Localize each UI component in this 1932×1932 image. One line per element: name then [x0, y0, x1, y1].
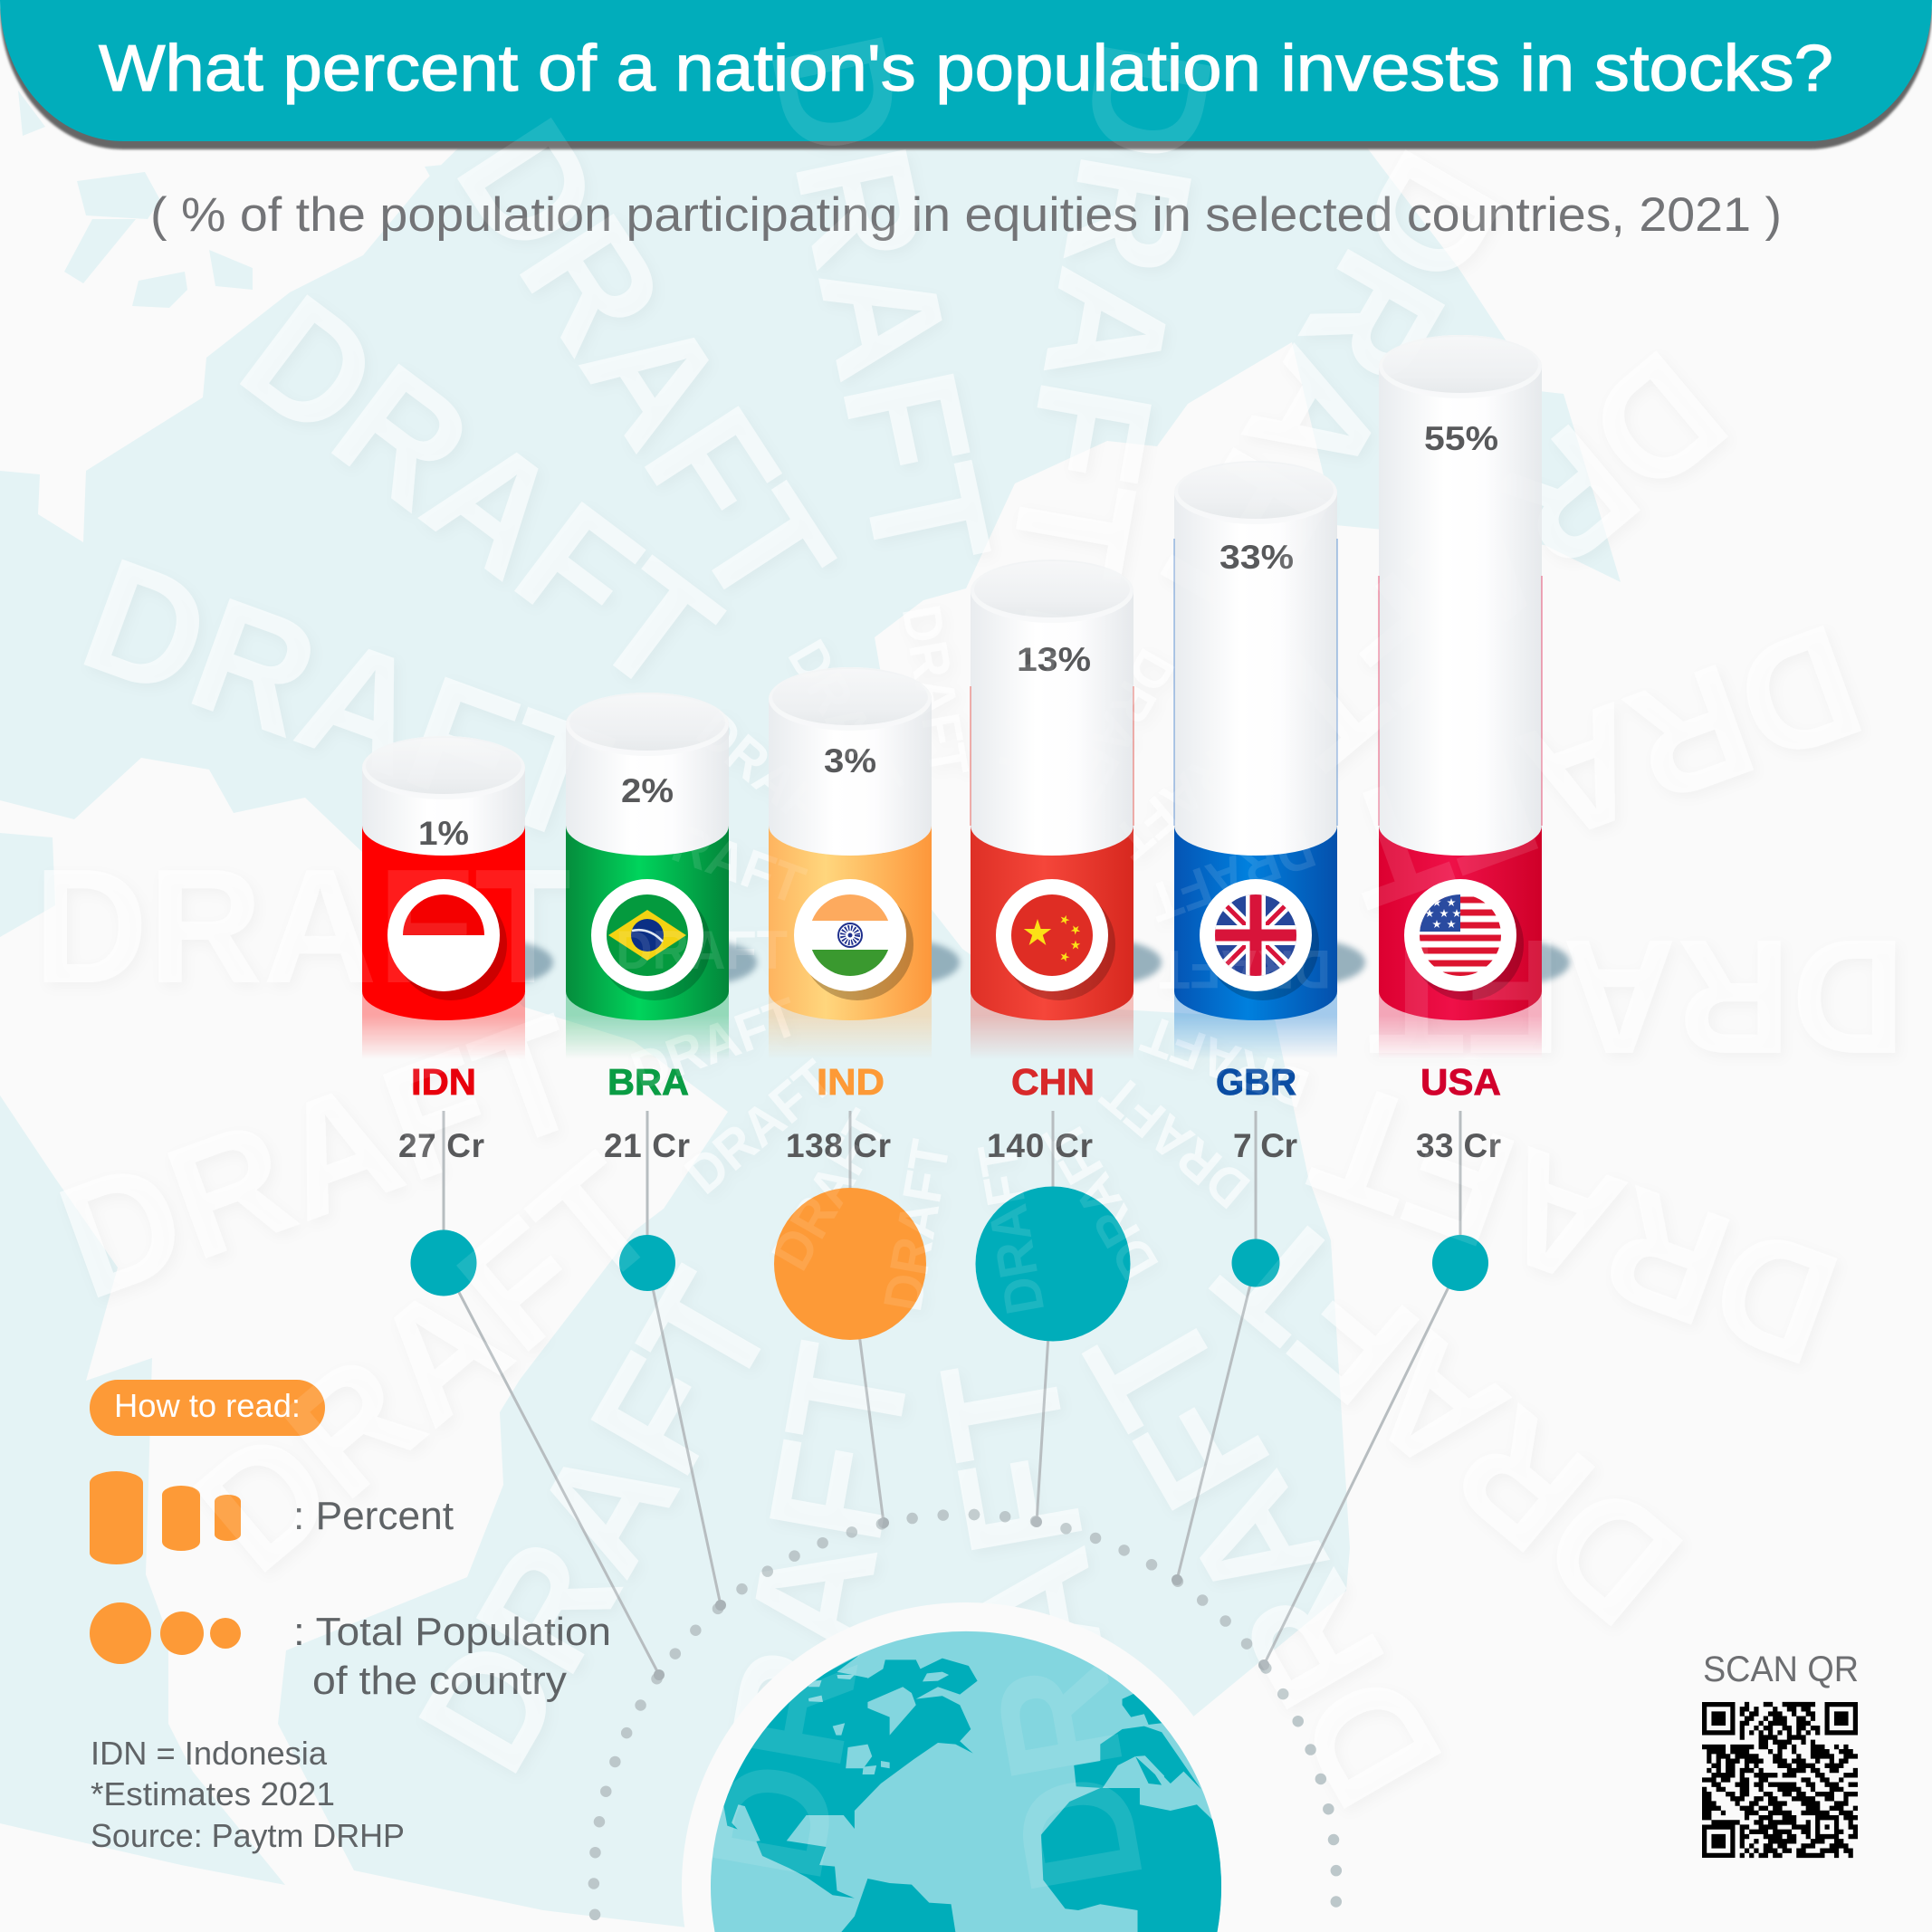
watermark: DRAFT rings, overlay layer: DRAFT	[33, 836, 571, 1018]
watermark: DRAFT rings, overlay layer: DRAFT	[1315, 588, 1883, 943]
watermark: DRAFT rings, under layer: DRAFT	[872, 1135, 961, 1315]
watermark: DRAFT rings, overlay layer: DRAFT	[1229, 317, 1758, 802]
watermark: DRAFT rings, under layer: DRAFT	[1102, 713, 1273, 871]
flag: India	[809, 894, 891, 976]
watermark: DRAFT rings, under layer: DRAFT	[735, 20, 1025, 584]
watermark: DRAFT rings, under layer: DRAFT	[1368, 905, 1906, 1087]
header band	[0, 0, 1932, 149]
watermark: DRAFT rings, under layer: DRAFT	[62, 523, 629, 878]
watermark: DRAFT rings, overlay layer: DRAFT	[1368, 905, 1906, 1087]
population labels: 33 Cr	[1416, 1127, 1501, 1164]
watermark: DRAFT rings, under layer: DRAFT	[891, 600, 980, 780]
watermark: DRAFT rings, overlay layer: DRAFT	[1292, 1045, 1860, 1400]
leader lines from cylinders through circles to the arc	[444, 1111, 1460, 1680]
watermark: DRAFT rings, under layer: DRAFT	[1159, 939, 1331, 999]
legend: population text: : Total Population	[293, 1610, 611, 1654]
watermark: DRAFT rings, overlay layer: DRAFT	[384, 1244, 810, 1800]
watermark: DRAFT rings, overlay layer: DRAFT	[1102, 713, 1273, 871]
watermark: DRAFT rings, under layer: DRAFT	[1031, 1110, 1170, 1289]
watermark: DRAFT rings, overlay layer: DRAFT	[1090, 1063, 1260, 1220]
watermark: DRAFT rings, under layer: DRAFT	[38, 980, 606, 1334]
percent labels: 3%	[824, 742, 876, 779]
watermark: DRAFT rings, overlay layer: DRAFT	[686, 699, 856, 856]
footnotes and source: Source: Paytm DRHP	[91, 1817, 405, 1854]
country codes: IND	[817, 1061, 885, 1103]
watermark: DRAFT rings, under layer: DRAFT	[210, 261, 749, 730]
cylinder: Indonesia	[362, 736, 553, 1059]
population labels: 21 Cr	[604, 1127, 690, 1164]
percent labels: 55%	[1424, 420, 1498, 457]
watermark: DRAFT rings, under layer: DRAFT	[1111, 123, 1537, 679]
population labels: 140 Cr	[987, 1127, 1093, 1164]
legend: population text	[293, 1610, 611, 1703]
watermark: DRAFT rings, under layer: DRAFT	[906, 1344, 1179, 1905]
watermark: DRAFT rings, overlay layer: DRAFT	[872, 1135, 961, 1315]
population circles	[411, 1186, 1488, 1342]
cylinder: Brazil	[566, 693, 757, 1059]
country codes: CHN	[1011, 1061, 1095, 1103]
flag: United Kingdom	[1215, 894, 1296, 976]
flag: United States	[1420, 894, 1501, 976]
footnotes and source: IDN = Indonesia	[91, 1735, 328, 1772]
globe with white halo	[682, 1602, 1250, 1932]
watermark: DRAFT rings, under layer: DRAFT	[985, 604, 1075, 784]
watermark: DRAFT rings, under layer: DRAFT	[1315, 588, 1883, 943]
subtitle: ( % of the population participating in equities in selected countries, 2021 )	[150, 188, 1782, 242]
watermark: DRAFT rings, overlay layer: DRAFT	[38, 980, 606, 1334]
legend pill: How to read:	[114, 1387, 301, 1424]
watermark: DRAFT rings, overlay layer: DRAFT	[62, 523, 629, 878]
watermark: DRAFT rings, under layer: DRAFT	[1185, 1174, 1714, 1659]
watermark: DRAFT rings, overlay layer: DRAFT	[210, 261, 749, 730]
population labels: 7 Cr	[1233, 1127, 1297, 1164]
dotted arc above the globe	[594, 1515, 1336, 1924]
watermark: DRAFT rings, overlay layer: DRAFT	[891, 600, 980, 780]
cylinder: China	[971, 560, 1162, 1059]
watermark: DRAFT rings, overlay layer: DRAFT	[1141, 818, 1323, 933]
population labels: 27 Cr	[398, 1127, 484, 1164]
cylinder: India	[769, 667, 960, 1059]
watermark: DRAFT rings, under layer: DRAFT	[1090, 1063, 1260, 1220]
watermark: DRAFT rings, under layer: DRAFT	[384, 1244, 810, 1800]
background world map	[0, 91, 1621, 1932]
watermark: DRAFT rings, overlay layer: DRAFT	[777, 630, 915, 809]
country codes: IDN	[411, 1061, 476, 1103]
watermark: DRAFT rings, overlay layer: DRAFT	[163, 1121, 692, 1606]
watermark: DRAFT rings, under layer: DRAFT	[674, 1332, 947, 1893]
cylinder: United Kingdom	[1174, 461, 1365, 1059]
legend: population circles	[90, 1602, 241, 1664]
QR code	[1702, 1702, 1858, 1858]
watermark: DRAFT rings, under layer: DRAFT	[163, 1121, 692, 1606]
watermark: DRAFT rings, under layer: DRAFT	[1048, 639, 1187, 818]
watermark: DRAFT rings, overlay layer: DRAFT	[674, 1048, 845, 1206]
population labels	[398, 1127, 1501, 1164]
watermark: DRAFT rings, under layer: DRAFT	[630, 800, 812, 915]
percent labels: 33%	[1219, 539, 1294, 576]
watermark: DRAFT rings, overlay layer: DRAFT	[1051, 1278, 1478, 1835]
watermark: DRAFT rings, under layer: DRAFT	[974, 30, 1247, 591]
cylinder: United States	[1379, 335, 1570, 1059]
watermark: DRAFT rings, overlay layer: DRAFT	[1031, 1110, 1170, 1289]
watermark: DRAFT rings, overlay layer: DRAFT	[624, 986, 806, 1102]
flag: Indonesia	[403, 894, 484, 935]
watermark: DRAFT rings, overlay layer: DRAFT	[1185, 1174, 1714, 1659]
watermark: DRAFT rings, overlay layer: DRAFT	[630, 800, 812, 915]
watermark: DRAFT rings, under layer: DRAFT	[760, 1101, 898, 1280]
watermark: DRAFT rings, overlay layer: DRAFT	[1048, 639, 1187, 818]
percent labels: 2%	[621, 772, 674, 809]
country codes	[411, 1061, 1501, 1103]
watermark: DRAFT rings, overlay layer: DRAFT	[1134, 1004, 1316, 1119]
country codes: USA	[1420, 1061, 1501, 1103]
flag: Brazil	[607, 894, 688, 976]
watermark: DRAFT rings, under layer: DRAFT	[1141, 818, 1323, 933]
watermark: DRAFT rings, under layer: DRAFT	[686, 699, 856, 856]
watermark: DRAFT rings, under layer: DRAFT	[1134, 1004, 1316, 1119]
watermark: DRAFT rings, overlay layer: DRAFT	[674, 1332, 947, 1893]
watermark: DRAFT rings, under layer: DRAFT	[422, 90, 867, 640]
flag: China	[1011, 894, 1093, 976]
title: What percent of a nation's population invests in stocks?	[99, 33, 1833, 105]
watermark: DRAFT rings, overlay layer: DRAFT	[760, 1101, 898, 1280]
watermark: DRAFT rings, overlay layer: DRAFT	[906, 1344, 1179, 1905]
watermark: DRAFT rings, overlay layer: DRAFT	[616, 920, 788, 980]
percent labels	[418, 420, 1498, 852]
watermark: DRAFT rings, overlay layer: DRAFT	[422, 90, 867, 640]
legend pill	[90, 1380, 325, 1436]
watermark: DRAFT rings, overlay layer: DRAFT	[1111, 123, 1537, 679]
legend: percent text: : Percent	[293, 1494, 454, 1538]
watermark: DRAFT rings, under layer: DRAFT	[624, 986, 806, 1102]
population labels: 138 Cr	[786, 1127, 891, 1164]
watermark: DRAFT rings, under layer: DRAFT	[1229, 317, 1758, 802]
watermark: DRAFT rings, overlay layer: DRAFT	[966, 1139, 1056, 1319]
watermark: DRAFT rings, under layer: DRAFT	[1051, 1278, 1478, 1835]
footnotes and source	[91, 1735, 405, 1854]
footnotes and source: *Estimates 2021	[91, 1775, 335, 1812]
watermark: DRAFT rings, under layer: DRAFT	[1292, 1045, 1860, 1400]
watermark: DRAFT rings, under layer: DRAFT	[966, 1139, 1056, 1319]
watermark: DRAFT rings, under layer: DRAFT	[616, 920, 788, 980]
watermark: DRAFT rings, under layer: DRAFT	[33, 836, 571, 1018]
percent labels: 1%	[418, 815, 469, 852]
watermark: DRAFT rings, overlay layer: DRAFT	[985, 604, 1075, 784]
percent labels: 13%	[1017, 641, 1091, 678]
legend: percent cylinders	[90, 1471, 241, 1564]
country codes: BRA	[607, 1061, 689, 1103]
watermark: DRAFT rings, overlay layer: DRAFT	[1159, 939, 1331, 999]
legend: population text: of the country	[312, 1659, 567, 1703]
watermark: DRAFT rings, overlay layer: DRAFT	[735, 20, 1025, 584]
watermark: DRAFT rings, under layer: DRAFT	[777, 630, 915, 809]
scan QR label: SCAN QR	[1703, 1650, 1859, 1689]
legend: how to read	[90, 1380, 611, 1854]
watermark: DRAFT rings, under layer: DRAFT	[674, 1048, 845, 1206]
watermark: DRAFT rings, overlay layer: DRAFT	[974, 30, 1247, 591]
country codes: GBR	[1216, 1061, 1296, 1103]
